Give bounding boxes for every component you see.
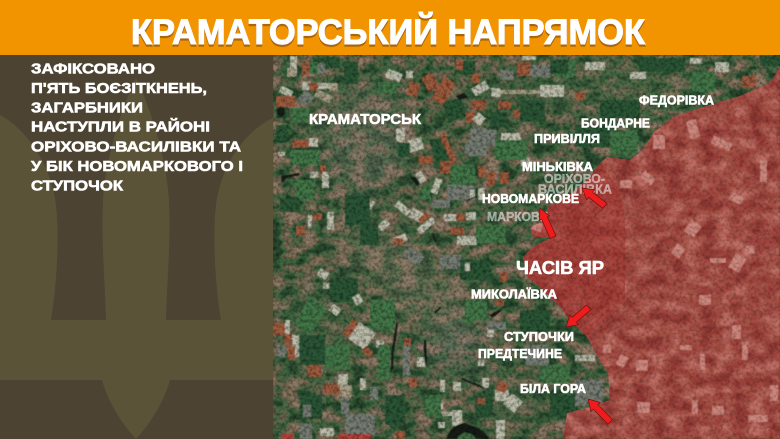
- title: КРАМАТОРСЬКИЙ НАПРЯМОК: [131, 12, 646, 52]
- map labels: КРАМАТОРСЬК: [309, 111, 422, 128]
- panel: left background: [0, 55, 273, 439]
- map labels: МІНЬКІВКА: [522, 160, 593, 174]
- map labels: БІЛА ГОРА: [520, 382, 586, 396]
- text block: situation summary: НАСТУПЛИ В РАЙОНІ: [31, 118, 210, 136]
- map labels: ВАСИЛІВКА: [538, 182, 612, 196]
- text block: situation summary: ЗАГАРБНИКИ: [31, 100, 143, 116]
- text block: situation summary: ОРІХОВО-ВАСИЛІВКИ ТА: [31, 138, 241, 156]
- map: occupied territory: [520, 60, 780, 439]
- lower-centre fields: [394, 201, 411, 216]
- map labels: ФЕДОРІВКА: [639, 94, 714, 108]
- map labels: НОВОМАРКОВЕ: [482, 192, 579, 206]
- text block: situation summary: СТУПОЧОК: [31, 178, 124, 194]
- icon: trident watermark: [0, 78, 273, 439]
- panel: satellite map: [273, 55, 780, 439]
- map labels: ПРИВІЛЛЯ: [534, 132, 600, 146]
- header bar: [0, 0, 780, 55]
- map labels: ПРЕДТЕЧИНЕ: [478, 347, 562, 361]
- map labels: [309, 94, 714, 396]
- centre fields: [396, 128, 405, 142]
- text block: situation summary: У БІК НОВОМАРКОВОГО І: [31, 158, 243, 175]
- map labels: ЧАСІВ ЯР: [516, 258, 604, 278]
- top-left fields: [290, 56, 297, 76]
- map labels: ОРІХОВО-: [544, 172, 605, 186]
- lower-centre fields 2: [440, 400, 444, 410]
- map labels: СТУПОЧКИ: [504, 330, 574, 344]
- dark water and gullies: [447, 423, 489, 439]
- text block: situation summary: ЗАФІКСОВАНО: [31, 60, 155, 78]
- map labels: МАРКОВЕ: [487, 210, 548, 224]
- top-centre fields: [385, 69, 403, 82]
- arrow: Bila Hora: [583, 394, 615, 427]
- arrow: Stupochky: [562, 302, 593, 332]
- map labels: МИКОЛАЇВКА: [471, 286, 557, 302]
- text block: situation summary: П'ЯТЬ БОЄЗІТКНЕНЬ,: [31, 80, 207, 97]
- map labels: БОНДАРНЕ: [581, 116, 650, 130]
- arrow: Novomarkove: [535, 206, 558, 239]
- text block: situation summary: [31, 60, 243, 194]
- lower-left fields: [317, 268, 329, 280]
- arrow: Orikhovo-Vasylivka: [578, 183, 609, 211]
